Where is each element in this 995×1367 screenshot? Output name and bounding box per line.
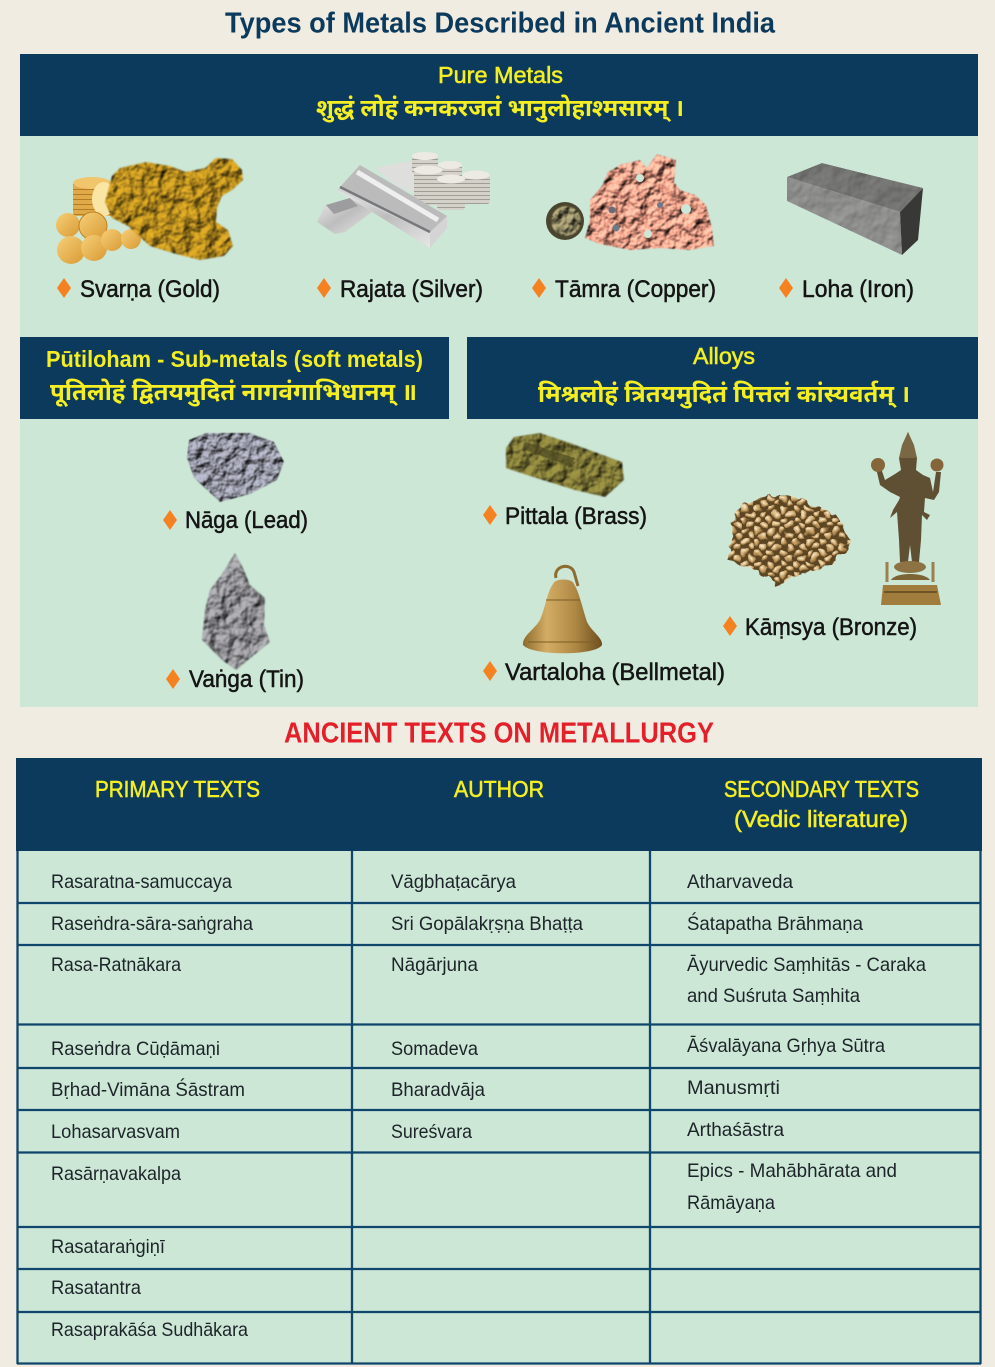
column: primary texts: Raseṅdra-sāra-saṅgraha bbox=[51, 913, 253, 935]
label: bronze: Kāṃsya (Bronze) bbox=[745, 614, 917, 641]
column: secondary texts: Rāmāyaṇa bbox=[687, 1192, 775, 1214]
label: copper: Tāmra (Copper) bbox=[555, 276, 716, 303]
title: Types of Metals Described in Ancient India bbox=[225, 8, 776, 40]
column: primary texts: Rasa-Ratnākara bbox=[51, 954, 181, 976]
table header: (Vedic literature) bbox=[734, 806, 908, 832]
label: gold: Svarṇa (Gold) bbox=[80, 276, 220, 303]
column: secondary texts: Āśvalāyana Gṛhya Sūtra bbox=[687, 1034, 885, 1057]
column: primary texts: Rasaprakāśa Sudhākara bbox=[51, 1319, 248, 1341]
label: iron: Loha (Iron) bbox=[802, 276, 914, 303]
panel: alloys bbox=[467, 337, 978, 686]
column: primary texts: Raseṅdra Cūḍāmaṇi bbox=[51, 1038, 220, 1060]
icon: lead bbox=[187, 433, 284, 502]
label: brass: Pittala (Brass) bbox=[505, 503, 647, 530]
header: alloys bbox=[467, 337, 978, 419]
header: pure metals bbox=[20, 54, 978, 136]
icon: tin bbox=[202, 553, 270, 670]
icon: bell bbox=[523, 566, 602, 653]
header: sub-metals bbox=[20, 337, 449, 419]
column: primary texts: Rasataraṅgiṇī bbox=[51, 1236, 166, 1258]
column: secondary texts bbox=[687, 871, 926, 1214]
icon: iron block bbox=[787, 163, 923, 255]
icon: bronze beads bbox=[728, 494, 850, 587]
header: pure metals: शुद्धं लोहं कनकरजतं भानुलोहाश्मसारम् । bbox=[316, 94, 684, 126]
table header: PRIMARY TEXTS bbox=[95, 776, 260, 802]
header: sub-metals: Pūtiloham - Sub-metals (soft metals) bbox=[46, 346, 423, 372]
label: lead: Nāga (Lead) bbox=[185, 507, 308, 534]
column: secondary texts: Epics - Mahābhārata and bbox=[687, 1160, 897, 1182]
column: primary texts: Rasaratna-samuccaya bbox=[51, 871, 232, 893]
table header bbox=[16, 758, 982, 851]
column: secondary texts: Āyurvedic Saṃhitās - Caraka bbox=[687, 953, 926, 976]
heading: ancient texts: ANCIENT TEXTS ON METALLURGY bbox=[284, 718, 714, 750]
header: alloys: मिश्रलोहं त्रितयमुदितं पित्तलं कांस्यवर्तम् । bbox=[538, 380, 910, 412]
column: secondary texts: Arthaśāstra bbox=[687, 1119, 784, 1141]
label: bellmetal: Vartaloha (Bellmetal) bbox=[505, 659, 725, 686]
column: secondary texts: Atharvaveda bbox=[687, 871, 793, 893]
panel: metals background bbox=[20, 136, 978, 707]
column: authors: Somadeva bbox=[391, 1038, 478, 1060]
header: alloys: Alloys bbox=[693, 343, 755, 369]
icon: bronze statue bbox=[871, 432, 944, 605]
column: primary texts: Lohasarvasvam bbox=[51, 1121, 180, 1143]
header: pure metals: Pure Metals bbox=[438, 62, 563, 88]
column: secondary texts: Śatapatha Brāhmaṇa bbox=[687, 911, 863, 935]
column: authors: Sri Gopālakṛṣṇa Bhaṭṭa bbox=[391, 913, 583, 935]
panel: pure metals bbox=[20, 54, 978, 303]
column: authors: Vāgbhaṭacārya bbox=[391, 871, 516, 893]
column: secondary texts: and Suśruta Saṃhita bbox=[687, 985, 860, 1007]
column: primary texts bbox=[51, 871, 253, 1341]
column: primary texts: Rasārṇavakalpa bbox=[51, 1163, 181, 1185]
table header: SECONDARY TEXTS bbox=[724, 776, 919, 802]
column: secondary texts: Manusmṛti bbox=[687, 1077, 780, 1099]
column: authors: Bharadvāja bbox=[391, 1079, 485, 1101]
icon: silver bars and coins bbox=[317, 152, 490, 248]
icon: brass ingot bbox=[506, 433, 624, 497]
column: authors: Sureśvara bbox=[391, 1121, 472, 1143]
icon: gold nugget and coins bbox=[56, 158, 243, 264]
table header: AUTHOR bbox=[454, 776, 544, 802]
panel: sub-metals bbox=[20, 337, 449, 693]
label: tin: Vaṅga (Tin) bbox=[189, 666, 304, 693]
icon: copper ore bbox=[546, 154, 714, 250]
header: sub-metals: पूतिलोहं द्वितयमुदितं नागवंगाभिधानम् ॥ bbox=[50, 378, 417, 410]
column: authors bbox=[391, 871, 583, 1143]
column: authors: Nāgārjuna bbox=[391, 954, 478, 976]
column: primary texts: Bṛhad-Vimāna Śāstram bbox=[51, 1077, 245, 1101]
column: primary texts: Rasatantra bbox=[51, 1277, 141, 1299]
table: ancient texts bbox=[16, 758, 982, 1364]
label: silver: Rajata (Silver) bbox=[340, 276, 483, 303]
